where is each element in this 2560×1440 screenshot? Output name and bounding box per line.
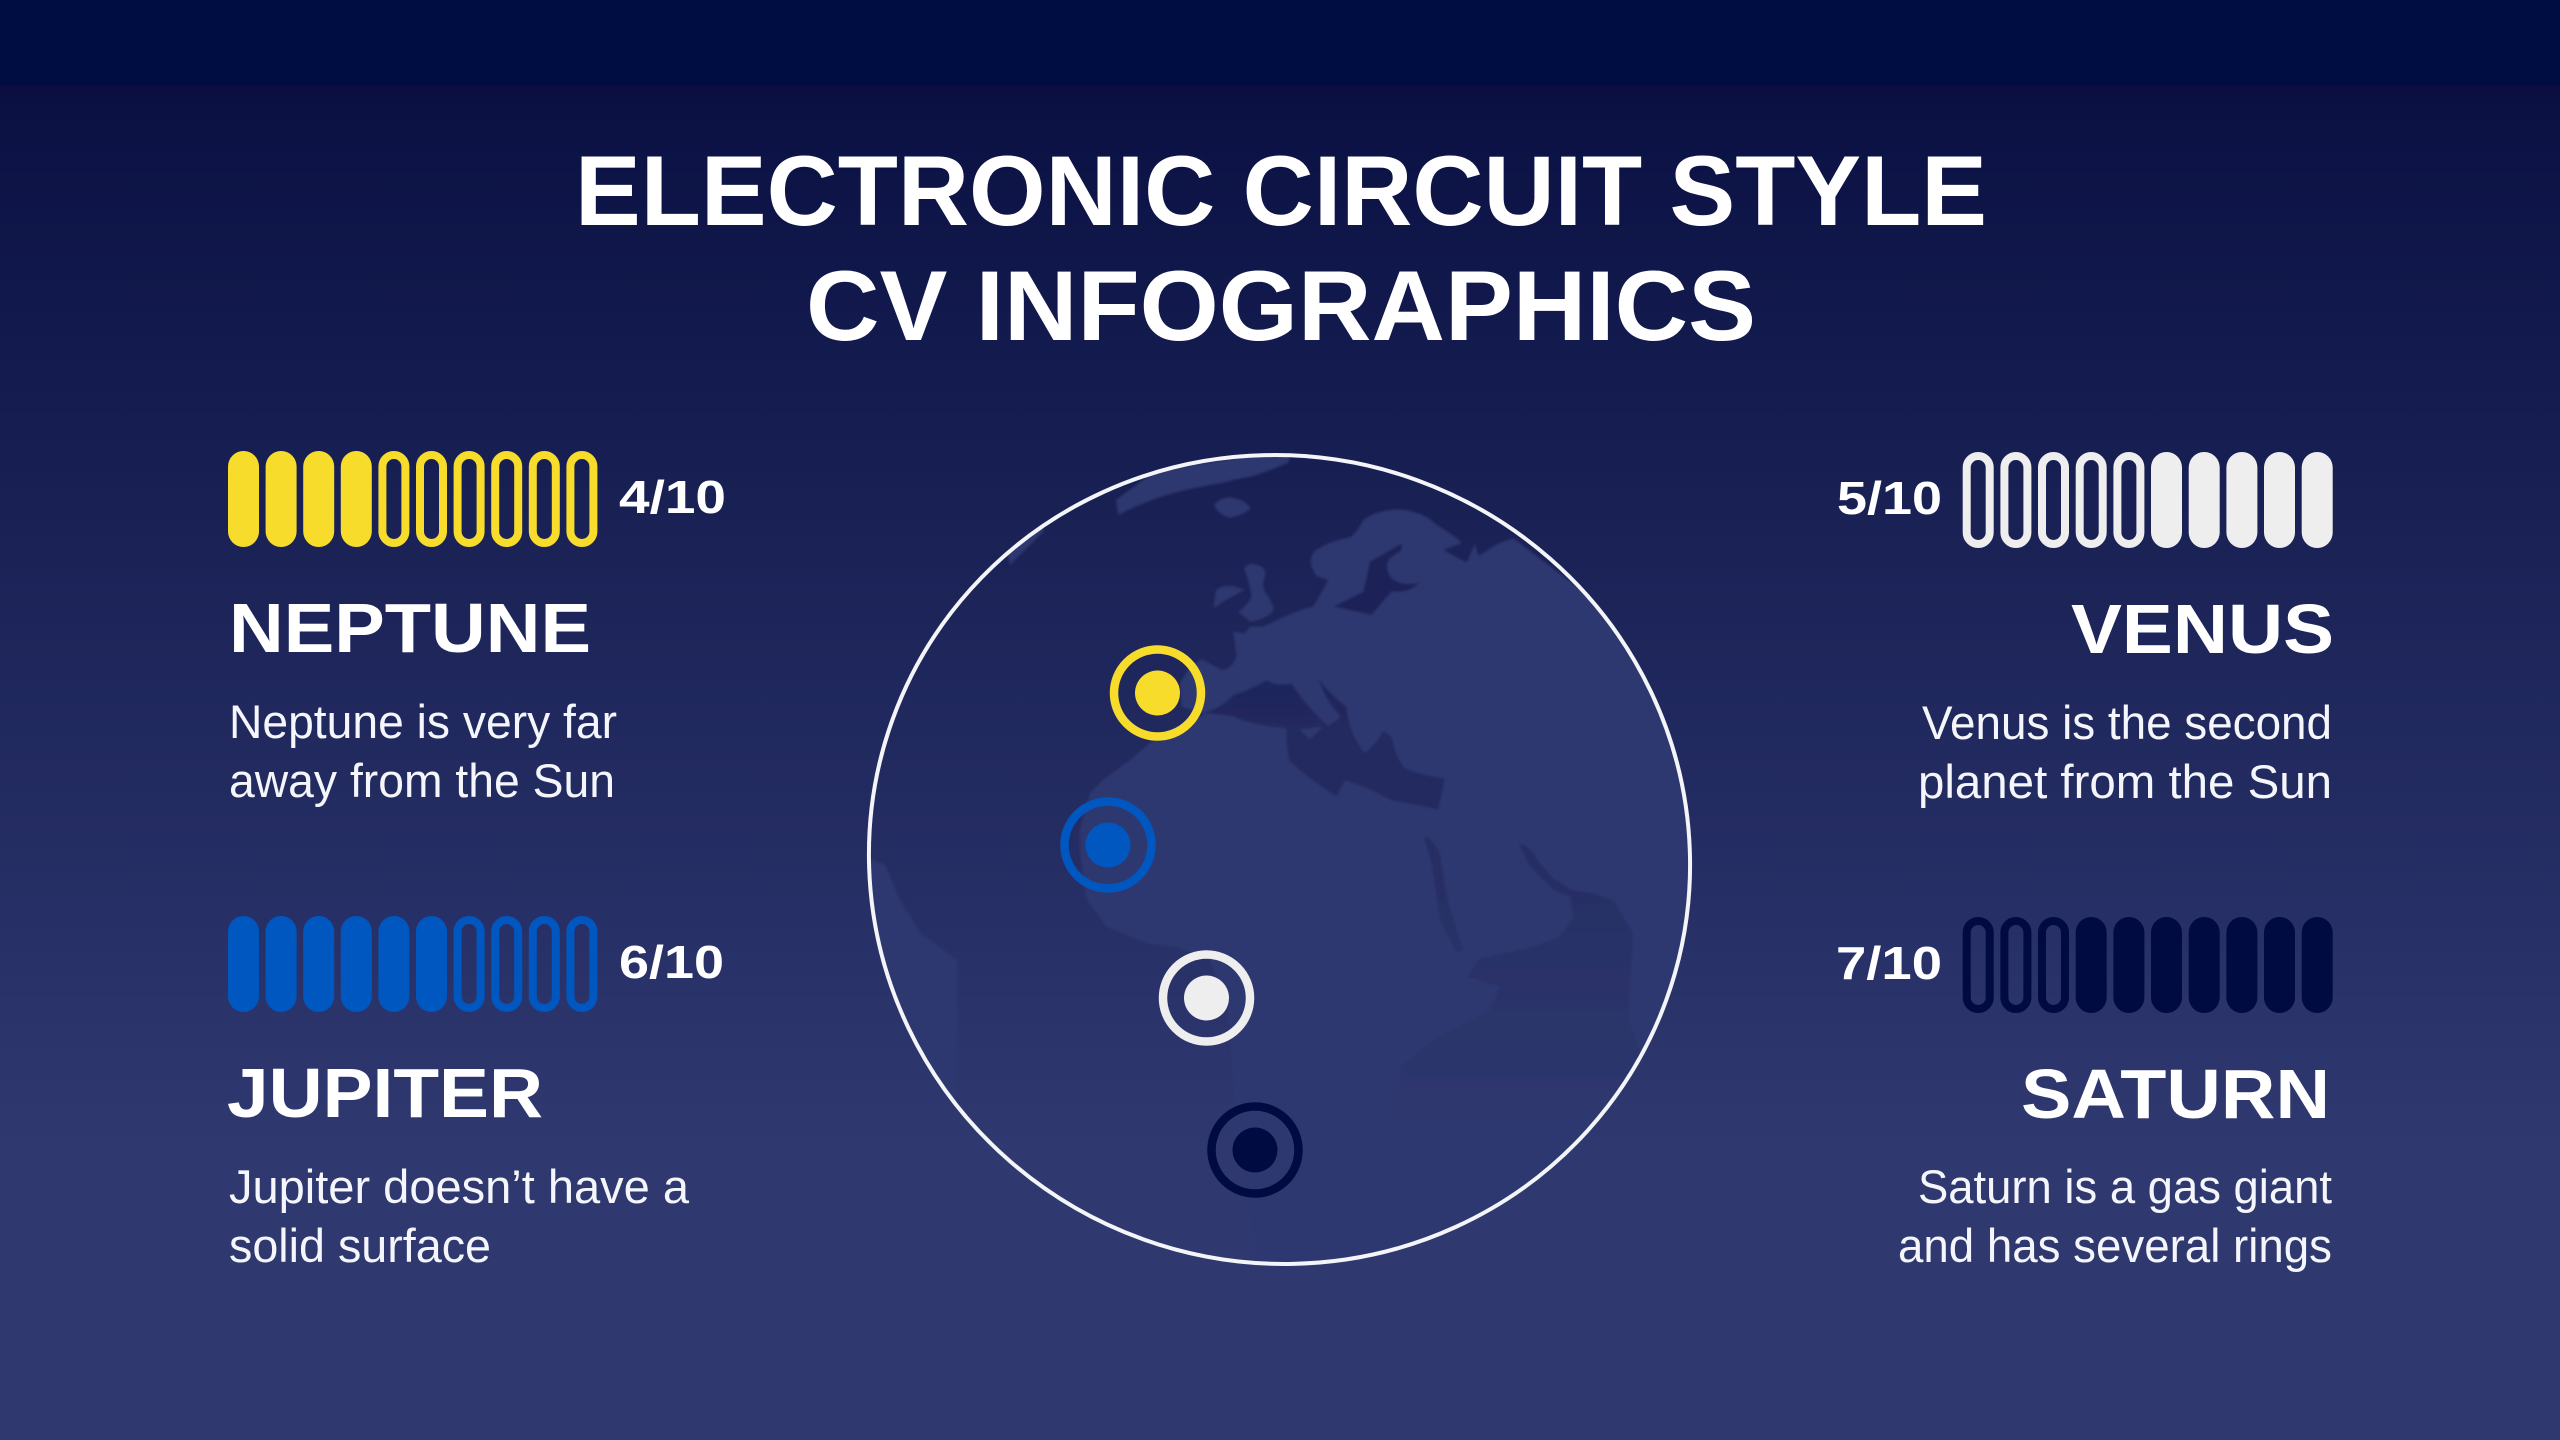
- globe land map: [871, 457, 1688, 964]
- score: 7/10: 7/10: [1836, 937, 1942, 989]
- marker: yellow: [1114, 650, 1201, 736]
- heading: Venus: VENUS: [2071, 590, 2334, 668]
- description: Jupiter: Jupiter doesn’t have a: [229, 1160, 690, 1213]
- description: Jupiter: [229, 1160, 690, 1272]
- title: [575, 135, 1987, 361]
- panel: Jupiter: [227, 916, 724, 1272]
- panel: Neptune: [228, 451, 726, 807]
- description: Saturn: Saturn is a gas giant: [1918, 1160, 2332, 1213]
- description: Venus: Venus is the second: [1922, 696, 2332, 749]
- panel: globe: [866, 453, 1692, 1266]
- heading: Saturn: SATURN: [2021, 1055, 2330, 1133]
- score: 6/10: 6/10: [619, 936, 724, 988]
- marker: white: [1163, 954, 1250, 1042]
- rating bar: Jupiter 6/10: [228, 916, 593, 1012]
- title: ELECTRONIC CIRCUIT STYLE: [575, 135, 1987, 246]
- title: CV INFOGRAPHICS: [806, 250, 1756, 361]
- description: Neptune: [229, 695, 617, 807]
- score: 4/10: 4/10: [619, 471, 726, 523]
- rating bar: Venus 5/10: [1967, 452, 2333, 548]
- description: Jupiter: solid surface: [229, 1219, 491, 1272]
- description: Venus: planet from the Sun: [1918, 755, 2332, 808]
- marker: navy: [1212, 1106, 1298, 1194]
- panel: Venus: [1837, 452, 2334, 808]
- description: Saturn: and has several rings: [1898, 1219, 2332, 1272]
- description: Saturn: [1898, 1160, 2332, 1272]
- description: Neptune: away from the Sun: [229, 754, 615, 807]
- rating bar: Neptune 4/10: [228, 451, 593, 547]
- description: Venus: [1918, 696, 2332, 808]
- marker: blue: [1064, 802, 1152, 888]
- globe outline: [755, 340, 1804, 1379]
- description: Neptune: Neptune is very far: [229, 695, 617, 748]
- score: 5/10: 5/10: [1837, 472, 1942, 524]
- heading: Neptune: NEPTUNE: [229, 589, 591, 667]
- rating bar: Saturn 7/10: [1967, 917, 2333, 1013]
- panel: Saturn: [1836, 917, 2333, 1272]
- heading: Jupiter: JUPITER: [227, 1054, 543, 1132]
